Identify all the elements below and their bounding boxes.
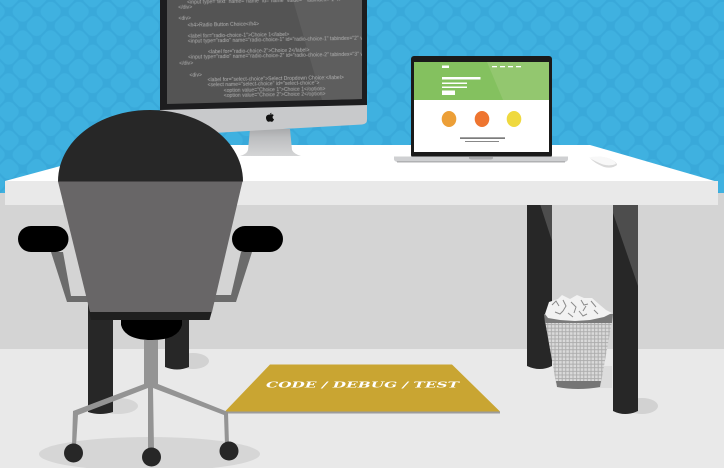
orange circle (442, 111, 456, 127)
icon: apple logo (266, 113, 274, 122)
laptop notch (469, 157, 493, 160)
code text: <label for="radio-choice-2">Choice 2</label> (208, 48, 310, 55)
office chair (18, 110, 283, 468)
code text: <div> (189, 72, 202, 79)
monitor stand (240, 129, 301, 156)
code text: </div> (178, 5, 192, 11)
blue patterned wall (0, 0, 724, 194)
footer line grey (465, 141, 499, 142)
mat surface (225, 364, 500, 412)
crumpled paper (545, 295, 612, 321)
right arm support (214, 252, 252, 302)
right armrest (232, 226, 283, 252)
desk leg: front right (613, 204, 638, 414)
footer line dark (460, 138, 505, 139)
header text lines (442, 77, 480, 95)
left armrest (18, 226, 68, 252)
laptop lid (411, 56, 552, 158)
seat (121, 320, 182, 340)
code text: <select name="select-choice" id="select-choice"> (208, 80, 319, 88)
code text: </div> (179, 61, 193, 67)
shadow: front left desk leg (98, 398, 138, 414)
code text: <option value="Choice 2">Choice 2</option> (224, 91, 326, 99)
laptop base (394, 156, 568, 162)
code text: <div> (178, 16, 191, 22)
code text: <h4>Radio Button Choice</h4> (188, 21, 259, 29)
left arm support (51, 252, 88, 302)
code text: <option value="Choice 1">Choice 1</option> (224, 86, 325, 94)
desk leg: back right (527, 204, 552, 369)
shadow: right desk leg (626, 398, 658, 414)
desk leg: front left (88, 300, 113, 414)
laptop reflection (487, 62, 549, 100)
code text: <label for="radio-choice-1">Choice 1</label> (188, 32, 289, 40)
basket base (556, 381, 601, 389)
yellow circle (507, 111, 521, 127)
screen (167, 0, 362, 104)
chair base (72, 340, 229, 450)
caster left (64, 444, 83, 462)
caster shadow (39, 437, 260, 468)
laptop screen green header (414, 62, 549, 100)
laptop screen white area (414, 62, 549, 152)
code text: <label for="select-choice">Select Dropdown Choice:</label> (207, 75, 344, 83)
shadow: rear left desk leg (177, 353, 209, 369)
desk leg: rear left (165, 300, 189, 370)
basket mesh (545, 321, 612, 383)
code text (178, 0, 362, 98)
basket rim (544, 314, 613, 323)
caster right (220, 442, 238, 460)
dark orange circle (475, 111, 489, 127)
mat text: CODE / DEBUG / TEST (266, 380, 460, 390)
grey lower wall (0, 193, 724, 350)
screen reflection (293, 0, 362, 100)
mat edge (225, 412, 500, 414)
basket shadow (585, 366, 612, 388)
floor (0, 349, 724, 468)
floor mat (225, 364, 500, 414)
mouse (589, 156, 617, 168)
monitor bezel (160, 0, 367, 110)
code text: <input type="radio" name="radio-choice-2" id="radio-choice-2" tabindex="3" value="choice-2" /> (188, 51, 405, 61)
desk front face (5, 181, 718, 205)
code text: <input type="radio" name="radio-choice-1" id="radio-choice-1" tabindex="2" value="choice-1" /> (188, 35, 404, 45)
seat back panel (58, 182, 242, 312)
header logo (442, 66, 449, 68)
desk (5, 145, 718, 205)
monitor (160, 0, 367, 156)
desk top surface (5, 145, 718, 182)
laptop (394, 56, 568, 162)
monitor chin (160, 103, 367, 136)
headrest dome (58, 110, 243, 182)
seat back lower band (89, 311, 212, 320)
caster centre (142, 448, 161, 466)
wastepaper basket (544, 295, 613, 389)
header nav (492, 66, 521, 67)
